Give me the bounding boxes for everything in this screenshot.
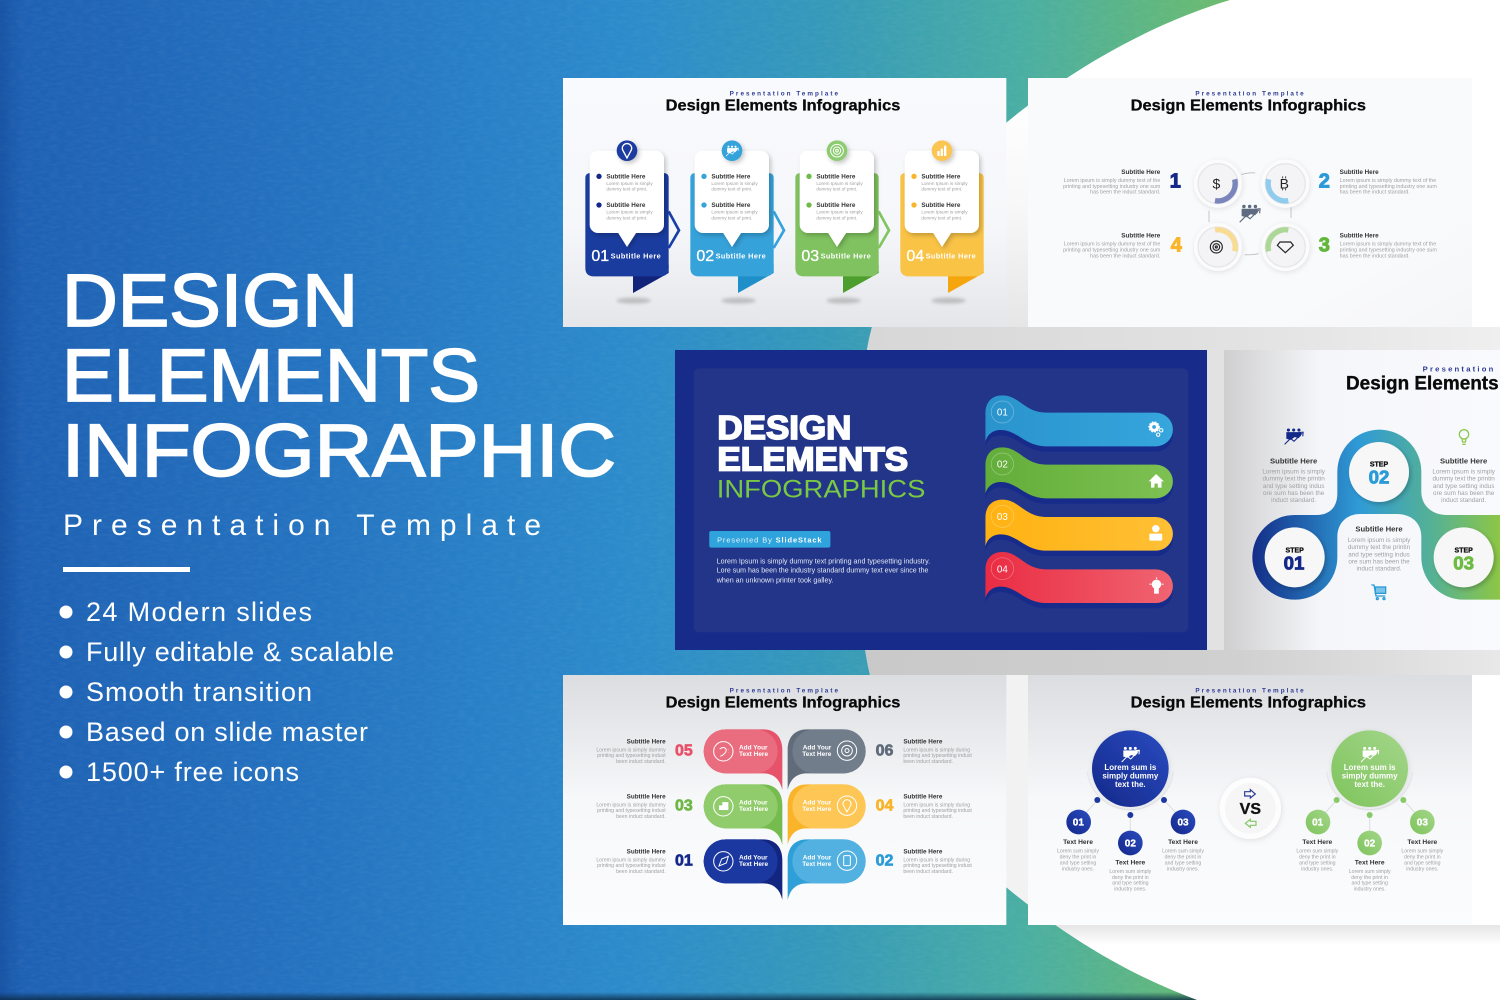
step 2 text — [1319, 169, 1437, 196]
bubble 05: 05 — [675, 742, 693, 759]
feature list: Based on slide master — [86, 717, 368, 747]
right item 01: Lorem sum simply — [1296, 849, 1339, 855]
panel: slide 5 six speech bubbles: Presentation Template — [730, 688, 838, 695]
bubble 01: Add Your — [739, 854, 768, 861]
panel: central title slide — [675, 350, 1207, 650]
card 04: Lorem Ipsum is simply — [921, 181, 968, 186]
bubble 03: Text Here — [739, 806, 768, 813]
ribbon 01: 01 — [997, 408, 1008, 419]
bubble 06: Lorem ipsum is simply during — [903, 747, 970, 753]
description: when an unknown printer took galley. — [716, 577, 833, 584]
text: right block: dummy text the printin — [1433, 476, 1495, 483]
card 02: dummy text of print. — [711, 187, 752, 192]
connector arrows — [1209, 173, 1291, 255]
card 03: 03 — [801, 248, 819, 265]
left item 03: deny the print in — [1165, 855, 1201, 861]
step 1 text: Subtitle Here — [1121, 169, 1161, 176]
ribbon 04 — [985, 552, 1173, 608]
slide title: DESIGN — [717, 410, 851, 447]
bubble 05: Text Here — [739, 751, 768, 758]
right comparison group: text the. — [1354, 780, 1385, 789]
left item 03 — [1162, 810, 1204, 872]
card 04: dummy text of print. — [921, 215, 962, 220]
bubble 01: printing and typesetting indust — [597, 863, 666, 869]
panel: slide 2 circular cycle — [1028, 78, 1472, 327]
circle 3 — [1261, 223, 1309, 271]
bubble 04 — [788, 784, 972, 845]
card 04: Subtitle Here — [921, 202, 961, 209]
ribbon 03: 03 — [997, 512, 1008, 523]
text: middle block: dummy text the printin — [1348, 544, 1411, 551]
main heading: INFOGRAPHIC — [62, 409, 616, 492]
bubble 02: Add Your — [803, 854, 832, 861]
panel: slide 2 circular cycle: Presentation Template — [1195, 91, 1304, 98]
description: Lorem Ipsum is simply dummy text printing and typesetting industry. — [717, 558, 930, 565]
left item 01: 01 — [1073, 818, 1084, 829]
text: left block: Lorem ipsum is simply — [1262, 469, 1326, 476]
right item 02: and type setting — [1351, 881, 1388, 887]
right item 03: and type setting — [1404, 860, 1441, 866]
white curved background shape — [840, 0, 1500, 1000]
text: left block: ore sum has been the — [1263, 490, 1325, 497]
bubble 03: Subtitle Here — [627, 793, 666, 800]
left item 01: and type setting — [1060, 860, 1096, 866]
text: middle block: and type setting indus — [1348, 551, 1410, 558]
card 01: dummy text of print. — [606, 187, 647, 192]
card 01: Subtitle Here — [611, 252, 661, 261]
left item 03: Lorem sum simply — [1162, 849, 1204, 855]
step 3 text: 3 — [1319, 234, 1330, 256]
step 4 text: Subtitle Here — [1121, 233, 1161, 240]
right comparison group: simply dummy — [1342, 772, 1398, 781]
VS badge: VS — [1240, 801, 1261, 818]
left comparison group: Lorem sum is — [1104, 763, 1157, 772]
step 3 text: Lorem ipsum is simply dummy text of the — [1340, 242, 1436, 248]
bubble 06: Subtitle Here — [903, 738, 943, 745]
left item 01: deny the print in — [1060, 855, 1096, 861]
right item 02: industry ones. — [1354, 887, 1386, 893]
right item 01: and type setting — [1299, 860, 1336, 866]
text: right block — [1432, 456, 1496, 504]
step 4 text: Lorem ipsum is simply dummy text of the — [1064, 242, 1160, 248]
bubble 06: 06 — [876, 742, 894, 759]
left item 01: industry ones. — [1062, 866, 1094, 872]
card 02: Subtitle Here — [711, 202, 751, 209]
card 03: dummy text of print. — [816, 187, 857, 192]
left item 01: Lorem sum simply — [1057, 849, 1099, 855]
ribbon 03 — [985, 500, 1173, 556]
panel: slide 1 four numbered cards: Design Elements Infographics — [666, 98, 900, 115]
right item 01: deny the print in — [1299, 855, 1336, 861]
panel: slide 4 three steps — [1224, 350, 1500, 650]
step 02: 02 — [1369, 466, 1389, 487]
feature list: Fully editable & scalable — [86, 637, 394, 667]
bubble 01: Lorem ipsum is simply dummy — [596, 857, 666, 863]
bubble 05: Lorem ipsum is simply dummy — [596, 747, 666, 753]
circle 1 — [1194, 160, 1242, 208]
bubble 04: Text Here — [802, 806, 832, 813]
center icon — [1240, 205, 1260, 222]
step 4 text: 4 — [1171, 234, 1182, 256]
card 01: dummy text of print. — [606, 215, 647, 220]
VS badge — [1220, 778, 1281, 839]
right item 02 — [1349, 831, 1391, 893]
bubble 01: 01 — [675, 852, 693, 869]
right item 01 — [1296, 810, 1339, 872]
bubble 01 — [596, 839, 782, 900]
feature list: 24 Modern slides — [86, 597, 312, 627]
bubble 03: printing and typesetting indust — [597, 808, 666, 814]
slide title: INFOGRAPHICS — [717, 476, 925, 504]
card 03 — [795, 140, 889, 304]
left item 02 — [1109, 831, 1152, 893]
slide title: ELEMENTS — [717, 442, 908, 479]
bubble 01: Text Here — [739, 861, 768, 868]
ribbon 02: 02 — [997, 460, 1008, 471]
right item 03: Text Here — [1407, 839, 1438, 846]
feature list: 1500+ free icons — [86, 757, 299, 787]
text: left block: and type setting indus — [1263, 483, 1324, 490]
step 2 text: printing and typesetting industry one sum — [1340, 184, 1437, 190]
right item 03: 03 — [1417, 818, 1428, 829]
heading underline — [63, 567, 190, 572]
right comparison group: Lorem sum is — [1344, 763, 1396, 772]
step 01: STEP — [1286, 547, 1304, 554]
bubble 05: Add Your — [739, 744, 768, 751]
text: right block: and type setting indus — [1433, 483, 1494, 490]
right item 03: deny the print in — [1404, 855, 1441, 861]
card 04 — [900, 140, 984, 304]
circle 2: B — [1280, 175, 1289, 191]
bubble 03: Add Your — [739, 799, 768, 806]
text: middle block: Subtitle Here — [1355, 525, 1403, 534]
panel: slide 6 versus comparison: Design Elements Infographics — [1131, 695, 1366, 712]
step 4 text: printing and typesetting industry one sum — [1063, 248, 1161, 254]
step 03 — [1434, 527, 1494, 587]
bubble 05: been induct standard. — [616, 759, 666, 765]
left comparison group: text the. — [1115, 780, 1146, 789]
card 04: Subtitle Here — [921, 173, 961, 180]
bubble 06: Text Here — [802, 751, 832, 758]
left item 03: industry ones. — [1167, 866, 1199, 872]
left comparison group: simply dummy — [1102, 772, 1159, 781]
main heading — [62, 259, 616, 492]
panel: slide 1 four numbered cards — [563, 78, 1006, 327]
panel: slide 2 circular cycle: Design Elements Infographics — [1131, 98, 1366, 115]
text: middle block: Lorem ipsum is simply — [1348, 537, 1411, 544]
left item 02: 02 — [1125, 839, 1136, 850]
left item 03: and type setting — [1165, 860, 1201, 866]
text: right block: induct standard. — [1441, 497, 1486, 504]
circle 1: $ — [1212, 175, 1220, 191]
bubble 02: Lorem ipsum is simply during — [903, 857, 970, 863]
left item 02: deny the print in — [1112, 875, 1149, 881]
panel: slide 6 versus comparison — [1028, 675, 1472, 925]
right item 02: deny the print in — [1351, 875, 1388, 881]
card 02: 02 — [696, 248, 714, 265]
ribbon 01 — [985, 395, 1173, 452]
left item 01: Text Here — [1063, 839, 1093, 846]
right item 03 — [1401, 810, 1444, 872]
left item 02: Text Here — [1115, 859, 1146, 866]
right comparison group — [1296, 730, 1444, 893]
card 04: dummy text of print. — [921, 187, 962, 192]
step 4 text — [1063, 233, 1182, 260]
card 01 — [585, 140, 679, 304]
step 3 text: printing and typesetting industry one sum — [1340, 248, 1437, 254]
connected step shape — [1252, 430, 1500, 600]
text: left block — [1262, 456, 1326, 504]
bubble 04: Subtitle Here — [903, 793, 943, 800]
card 01: Subtitle Here — [606, 173, 646, 180]
bubble 03: been induct standard. — [616, 814, 666, 820]
step 3 text: has been the induct standard. — [1340, 254, 1410, 260]
bubble 04: printing and typesetting indust — [903, 808, 972, 814]
card 04: 04 — [906, 248, 924, 265]
step 3 text — [1319, 233, 1437, 260]
right item 02: Text Here — [1355, 859, 1385, 866]
text: middle block — [1348, 525, 1411, 572]
text: right block: Lorem ipsum is simply — [1432, 469, 1496, 476]
card 03: dummy text of print. — [816, 215, 857, 220]
main heading: ELEMENTS — [62, 334, 480, 417]
step 02: STEP — [1370, 461, 1388, 468]
bubble 06: been induct standard. — [903, 759, 953, 765]
icon: cart — [1371, 585, 1386, 600]
bubble 02: Subtitle Here — [903, 848, 943, 855]
bubble 05: printing and typesetting indust — [597, 753, 666, 759]
right item 02: Lorem sum simply — [1349, 869, 1391, 875]
bubble 02 — [788, 839, 972, 900]
bubble 04: Add Your — [803, 799, 832, 806]
subheading: Presentation Template — [63, 509, 541, 542]
card 02: Subtitle Here — [711, 173, 751, 180]
circle 2 — [1261, 160, 1309, 208]
step 1 text: has been the induct standard. — [1090, 190, 1160, 196]
panel: slide 6 versus comparison: Presentation Template — [1195, 688, 1304, 695]
step 01: 01 — [1284, 553, 1304, 574]
card 02: dummy text of print. — [711, 215, 752, 220]
card 02 — [690, 140, 784, 304]
left item 02: and type setting — [1112, 881, 1149, 887]
bubble 02: printing and typesetting indust — [903, 863, 972, 869]
step 2 text: Subtitle Here — [1340, 169, 1379, 176]
description — [716, 558, 930, 584]
right item 01: industry ones. — [1301, 866, 1333, 872]
left item 03: 03 — [1177, 818, 1189, 829]
text: left block: Subtitle Here — [1270, 456, 1317, 465]
presenter badge — [709, 531, 830, 548]
card 03: Subtitle Here — [816, 173, 856, 180]
right item 01: 01 — [1312, 818, 1324, 829]
right item 01: Text Here — [1302, 839, 1333, 846]
left comparison group — [1057, 730, 1204, 893]
card 01: Subtitle Here — [606, 202, 646, 209]
text: right block: ore sum has been the — [1433, 490, 1495, 497]
right item 03: industry ones. — [1406, 866, 1438, 872]
card 01: Lorem Ipsum is simply — [606, 210, 653, 215]
step 2 text: has been the induct standard. — [1340, 190, 1410, 196]
bubble 01: Subtitle Here — [627, 848, 666, 855]
bubble 04: 04 — [876, 797, 894, 814]
bubble 03 — [596, 784, 782, 845]
bubble 06 — [788, 729, 972, 790]
presenter badge: Presented By SlideStack — [717, 535, 822, 544]
bubble 06: Add Your — [803, 744, 832, 751]
bubble 06: printing and typesetting indust — [903, 753, 972, 759]
step 1 text: Lorem ipsum is simply dummy text of the — [1064, 178, 1160, 184]
slide title — [717, 410, 925, 504]
step 1 text: 1 — [1170, 170, 1181, 192]
card 03: Subtitle Here — [816, 202, 856, 209]
bubble 02: Text Here — [802, 861, 832, 868]
text: middle block: ore sum has been the — [1348, 558, 1410, 565]
panel: slide 4 three steps: Design Elements — [1346, 373, 1499, 394]
right item 02: 02 — [1364, 839, 1376, 850]
step 2 text: Lorem ipsum is simply dummy text of the — [1340, 178, 1436, 184]
panel: slide 1 four numbered cards: Presentation Template — [730, 91, 838, 98]
left item 02: Lorem sum simply — [1109, 869, 1152, 875]
card 03: Lorem Ipsum is simply — [816, 210, 863, 215]
step 4 text: has been the induct standard. — [1090, 254, 1160, 260]
panel: slide 5 six speech bubbles — [563, 675, 1006, 925]
step 1 text — [1063, 169, 1181, 196]
panel: slide 4 three steps: Presentation — [1423, 365, 1494, 374]
icon: bulb — [1459, 430, 1469, 444]
card 03: Subtitle Here — [821, 252, 871, 261]
ribbon 04: 04 — [997, 564, 1008, 575]
step 02 — [1349, 442, 1409, 502]
bubble 05 — [596, 729, 782, 790]
card 02: Lorem Ipsum is simply — [711, 210, 758, 215]
main heading: DESIGN — [62, 259, 358, 342]
card 03: Lorem Ipsum is simply — [816, 181, 863, 186]
left item 03: Text Here — [1168, 839, 1198, 846]
card 02: Lorem Ipsum is simply — [711, 181, 758, 186]
step 03: 03 — [1453, 553, 1474, 574]
card 01: 01 — [591, 248, 609, 265]
bubble 02: been induct standard. — [903, 869, 953, 875]
circle 4 — [1194, 223, 1242, 271]
step 01 — [1265, 527, 1325, 587]
card 04: Lorem Ipsum is simply — [921, 210, 968, 215]
feature list: Smooth transition — [86, 677, 312, 707]
step 3 text: Subtitle Here — [1340, 233, 1379, 240]
ribbon 02 — [985, 447, 1173, 504]
step 03: STEP — [1455, 547, 1473, 554]
left item 02: industry ones. — [1114, 887, 1146, 893]
icon: people growth — [1285, 428, 1303, 444]
bubble 03: 03 — [675, 797, 693, 814]
text: left block: dummy text the printin — [1263, 476, 1325, 483]
right item 03: Lorem sum simply — [1401, 849, 1444, 855]
step 2 text: 2 — [1319, 170, 1330, 192]
bubble 03: Lorem ipsum is simply dummy — [596, 802, 666, 808]
bubble 05: Subtitle Here — [627, 738, 666, 745]
description: Lore sum has been the industry standard dummy text ever since the — [717, 568, 929, 575]
card 02: Subtitle Here — [716, 252, 766, 261]
bubble 04: been induct standard. — [903, 814, 953, 820]
bubble 02: 02 — [876, 852, 894, 869]
card 04: Subtitle Here — [926, 252, 976, 261]
step 1 text: printing and typesetting industry one sum — [1063, 184, 1161, 190]
bubble 01: been induct standard. — [616, 869, 666, 875]
left item 01 — [1057, 810, 1099, 872]
text: left block: induct standard. — [1271, 497, 1316, 504]
bubble 04: Lorem ipsum is simply during — [903, 802, 970, 808]
text: right block: Subtitle Here — [1440, 456, 1487, 465]
text: middle block: induct standard. — [1356, 565, 1402, 572]
panel: slide 5 six speech bubbles: Design Elements Infographics — [666, 695, 900, 712]
card 01: Lorem Ipsum is simply — [606, 181, 653, 186]
feature list — [60, 597, 394, 787]
